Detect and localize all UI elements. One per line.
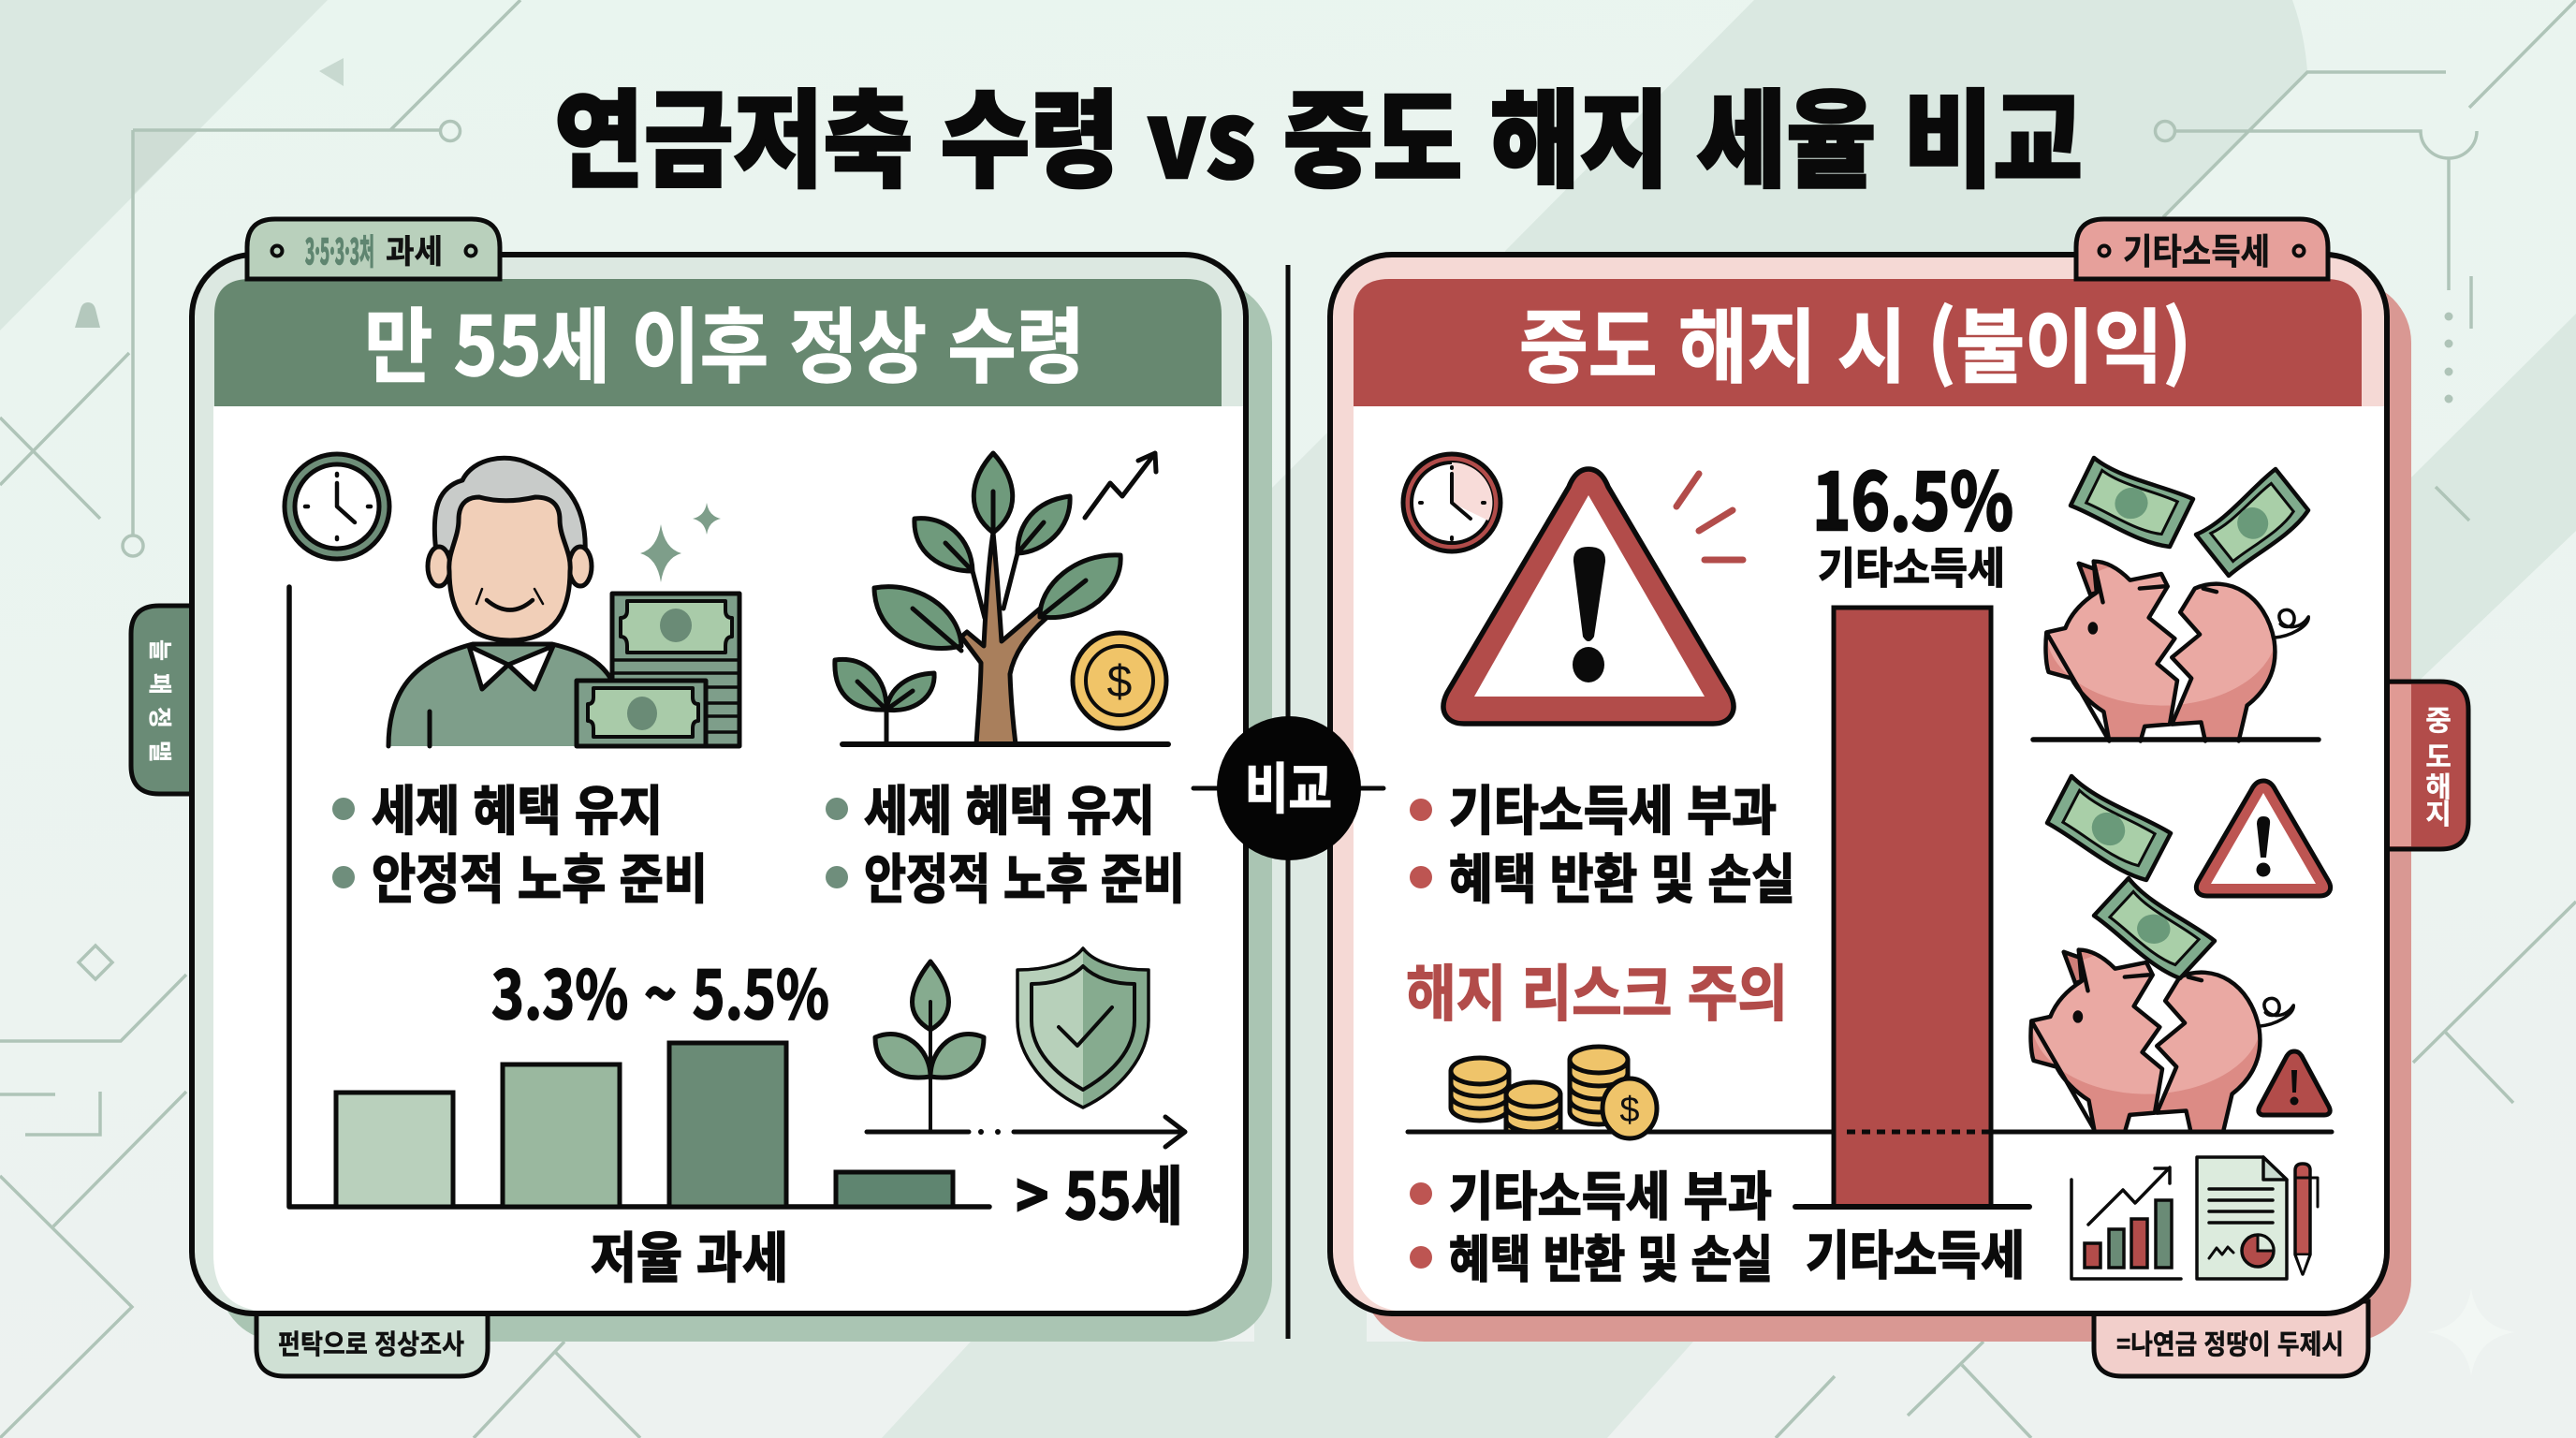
- icon: clock: [1403, 454, 1500, 551]
- bullet list 1: 안정적 노후 준비: [372, 837, 708, 914]
- right side tab: 중: [2425, 697, 2452, 739]
- left side tab: 늘패정맬: [144, 639, 178, 762]
- icon: broken piggy bank 1: [2041, 557, 2308, 745]
- top tab: [2076, 219, 2328, 279]
- icon: clock: [285, 454, 389, 559]
- bottom tab: =나연금 정땅이 두제시: [2116, 1323, 2344, 1362]
- icon: growing tree: [835, 453, 1168, 744]
- icon: senior person: [388, 458, 610, 746]
- icon: growth arrow: [1085, 453, 1156, 518]
- penalty label: 기타소득세: [1818, 535, 2005, 596]
- icon: tiny warning triangle: [2259, 1051, 2330, 1115]
- icon: coin stacks: [1451, 1047, 1657, 1138]
- panel: early termination: [1330, 219, 2468, 1376]
- arrow: time axis: [867, 1117, 1185, 1147]
- icon: sparkles: [640, 503, 721, 582]
- icon: gold coin: [1073, 633, 1166, 728]
- header band: [214, 279, 1222, 406]
- top tab: [247, 219, 500, 279]
- shelf line: [2033, 737, 2319, 742]
- top tab: 기타소득세: [2123, 223, 2270, 274]
- header text: 중도 해지 시 (불이익): [1519, 282, 2191, 399]
- bullet list 1: [332, 769, 708, 914]
- icon: tax document: [2197, 1157, 2287, 1279]
- comparison badge: [1193, 716, 1383, 860]
- center divider line: [1286, 265, 1290, 1339]
- icon: seedling: [875, 961, 984, 1132]
- bottom tab: [2094, 1301, 2368, 1376]
- tax rate value: 3.3% ~ 5.5%: [491, 943, 829, 1038]
- bullet list 1: 기타소득세 부과: [1449, 769, 1777, 845]
- left side tab: [131, 606, 192, 794]
- top tab: 과세: [386, 226, 443, 273]
- bar chart: other income tax: [1795, 608, 2029, 1207]
- icon: broken piggy bank 2: [2026, 946, 2293, 1134]
- icon: shield: [1017, 948, 1149, 1108]
- risk warning heading: 해지 리스크 주의: [1406, 945, 1788, 1033]
- ground line: [1408, 1129, 2332, 1135]
- icon: flying bill A: [2069, 458, 2193, 550]
- right side tab: 도: [2425, 734, 2452, 775]
- bullet list 1: 혜택 반환 및 손실: [1449, 837, 1795, 914]
- icon: flying bill C: [2045, 776, 2171, 884]
- icon: pen: [2295, 1164, 2318, 1274]
- header text: 만 55세 이후 정상 수령: [364, 282, 1085, 400]
- age label: > 55세: [1016, 1145, 1183, 1238]
- bullet list 2: 혜택 반환 및 손실: [1449, 1218, 1773, 1292]
- icon: gold coin: $: [1107, 657, 1132, 707]
- right side tab: 해: [2425, 764, 2452, 805]
- icon: warning triangle small: [2196, 781, 2331, 896]
- icon: warning rays: [1676, 474, 1743, 560]
- icon: cash stack: [577, 594, 739, 746]
- bullet list 2: 기타소득세 부과: [1449, 1155, 1772, 1231]
- icon: flying bill D: [2091, 878, 2215, 981]
- bullet list 2: 안정적 노후 준비: [864, 837, 1185, 914]
- right side tab: 지: [2425, 791, 2452, 832]
- right side tab: [2387, 682, 2468, 849]
- bullet list 1: [1410, 769, 1795, 914]
- bottom tab: [256, 1311, 488, 1376]
- bottom tab: 펀탁으로 정상조사: [278, 1323, 464, 1362]
- icon: flying bill B: [2196, 469, 2311, 579]
- panel shadow: [1363, 281, 2411, 1342]
- bullet list 2: [826, 769, 1185, 914]
- panel shadow: [219, 281, 1272, 1342]
- chart axis: [289, 587, 989, 1207]
- header band: [1354, 279, 2362, 406]
- panel: normal receipt after 55: [131, 219, 1272, 1376]
- bullet list 1: 세제 혜택 유지: [372, 769, 663, 845]
- top tab: 3·5·3·3처: [305, 224, 374, 274]
- bar chart: low tax: [336, 1043, 953, 1207]
- penalty rate value: 16.5%: [1812, 440, 2013, 553]
- icon: large warning triangle: [1443, 469, 1734, 724]
- panel body: [192, 255, 1246, 1313]
- bar caption: 기타소득세: [1806, 1214, 2025, 1290]
- bullet list 2: [1410, 1155, 1773, 1292]
- icon: growth chart: [2071, 1167, 2181, 1279]
- bullet list 2: 세제 혜택 유지: [864, 769, 1155, 845]
- chart caption: 저율 과세: [591, 1214, 788, 1293]
- panel body: [1330, 255, 2387, 1313]
- comparison badge: 비교: [1245, 745, 1332, 824]
- icon: coin stacks: $: [1619, 1091, 1640, 1130]
- title: 연금저축 수령 vs 중도 해지 세율 비교: [554, 55, 2083, 209]
